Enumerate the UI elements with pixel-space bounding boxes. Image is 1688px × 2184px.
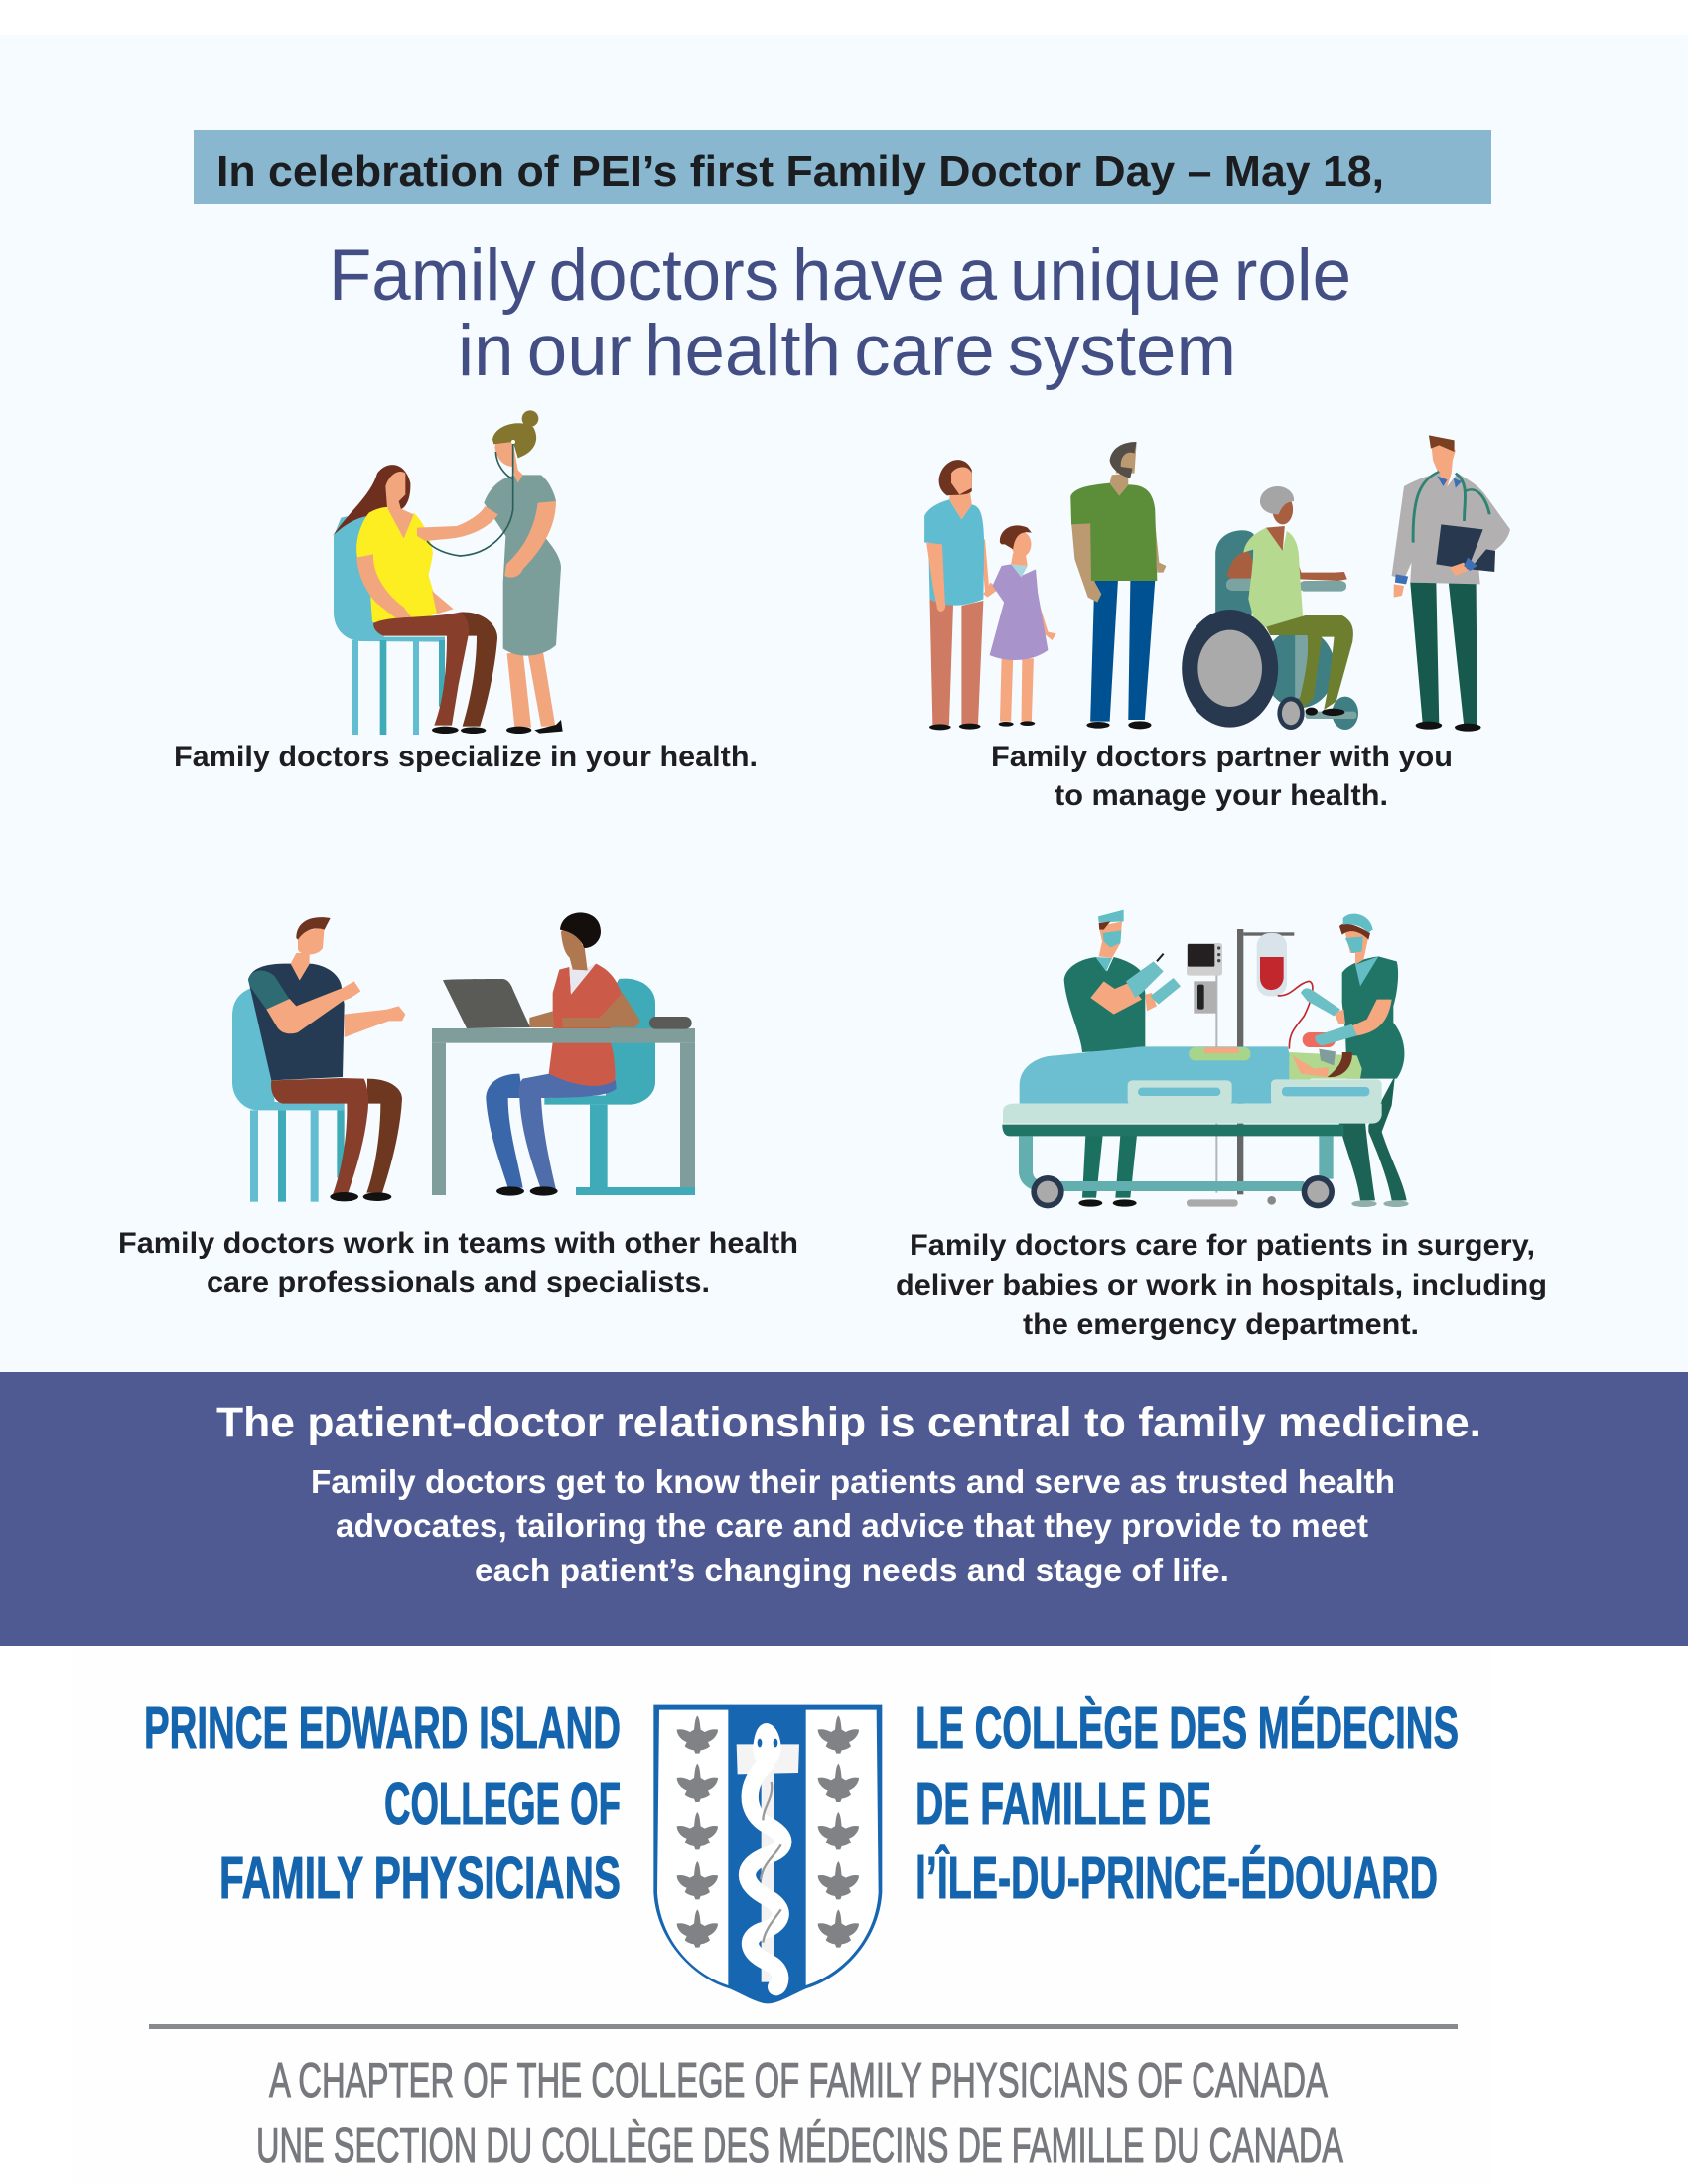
child (983, 525, 1056, 727)
caption: partner (991, 741, 1453, 812)
caption: specialize: Family doctors specialize in your health. (174, 741, 758, 773)
logo text: English (144, 1696, 621, 1911)
logo text: English: FAMILY PHYSICIANS (219, 1845, 621, 1911)
caption: teams: Family doctors work in teams with other health (118, 1227, 798, 1260)
caption: teams (118, 1227, 798, 1298)
bed (1002, 1079, 1382, 1208)
logo text: English: PRINCE EDWARD ISLAND (144, 1696, 621, 1761)
maple leaves (677, 1715, 859, 1948)
header banner (194, 130, 1491, 204)
illustration: family, patient in wheelchair and doctor (924, 435, 1510, 732)
icon: shield crest with rod of Asclepius and maple leaves (653, 1705, 882, 2003)
header banner: In celebration of PEI’s first Family Doctor Day – May 18, (216, 147, 1384, 196)
divider line (149, 2024, 1458, 2029)
caption: partner: Family doctors partner with you (991, 741, 1453, 773)
seated man (232, 917, 405, 1202)
doctor (1392, 435, 1510, 732)
panel: patient-doctor relationship: advocates, tailoring the care and advice that they provide to meet (336, 1507, 1368, 1544)
panel: patient-doctor relationship: each patient’s changing needs and stage of life. (475, 1552, 1229, 1588)
caption: teams: care professionals and specialists. (207, 1266, 710, 1298)
surgeon (1064, 910, 1181, 1207)
monitor (1187, 943, 1238, 1207)
patient on bed (1020, 1046, 1362, 1104)
caption: surgery and hospitals (896, 1229, 1547, 1341)
chapter statement (256, 2054, 1343, 2173)
doctor at desk (432, 912, 695, 1196)
caption: surgery and hospitals: Family doctors care for patients in surgery, (910, 1229, 1535, 1262)
caption: surgery and hospitals: the emergency department. (1023, 1308, 1419, 1341)
panel: patient-doctor relationship (0, 1372, 1688, 1646)
title: Family doctors have a unique role (329, 235, 1351, 316)
logo panel background (71, 1646, 1491, 2184)
logo text: English: COLLEGE OF (384, 1771, 621, 1837)
caption: surgery and hospitals: deliver babies or work in hospitals, including (896, 1269, 1547, 1301)
mother (924, 460, 989, 730)
illustration: doctor listening to seated patient with stethoscope (333, 410, 563, 735)
father (1070, 442, 1166, 729)
illustration: surgeon and nurse around hospital bed (1002, 910, 1409, 1208)
panel: patient-doctor relationship: The patient-doctor relationship is central to family medicine. (216, 1399, 1481, 1446)
nurse (1301, 914, 1409, 1207)
logo text: French: l’ÎLE-DU-PRINCE-ÉDOUARD (915, 1844, 1438, 1911)
panel: patient-doctor relationship: Family doctors get to know their patients and serve as trusted health (311, 1463, 1395, 1500)
logo text: French (915, 1696, 1459, 1911)
caption: partner: to manage your health. (1055, 779, 1388, 812)
illustration: patient and doctor at desk with laptop (232, 912, 695, 1202)
title (329, 235, 1351, 391)
patient in wheelchair (1182, 486, 1358, 730)
title: in our health care system (458, 311, 1236, 391)
logo text: French: DE FAMILLE DE (915, 1771, 1211, 1837)
rod and serpent (737, 1723, 799, 1987)
IV drip (1237, 929, 1313, 1205)
